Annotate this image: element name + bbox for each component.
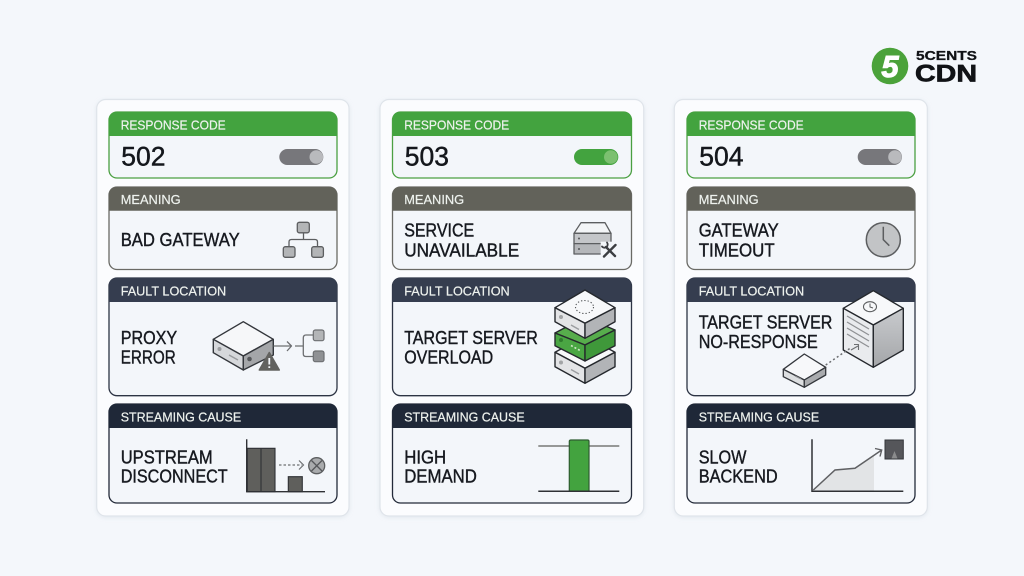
panel: streaming cause slow backend <box>687 404 915 503</box>
panel: response code 504 <box>687 112 915 178</box>
panel: fault location target server overload: OVERLOAD <box>404 346 493 367</box>
panel: response code 503: 503 <box>405 142 449 172</box>
card: 504 <box>674 100 927 516</box>
panel: fault location target server no-response: FAULT LOCATION <box>699 283 804 298</box>
panel: fault location target server overload: TARGET SERVER <box>404 327 538 348</box>
panel: streaming cause high demand: STREAMING CAUSE <box>404 410 525 425</box>
panel: response code 502 <box>109 112 337 178</box>
panel: response code 502: 502 <box>121 142 166 172</box>
panel: response code 503: RESPONSE CODE <box>404 117 509 132</box>
icon: server stack <box>555 290 615 383</box>
bottom server <box>555 336 615 383</box>
logo: 5cents cdn <box>872 48 977 88</box>
panel: meaning bad gateway <box>109 187 337 270</box>
panel: meaning service unavailable <box>392 187 632 270</box>
logo wordmark <box>915 48 977 88</box>
panel: meaning gateway timeout: GATEWAY <box>699 220 779 241</box>
panel: meaning gateway timeout: MEANING <box>699 192 759 207</box>
chart: falling bars <box>247 439 325 492</box>
icon: clock <box>866 223 900 257</box>
logo wordmark: CDN <box>915 61 977 88</box>
panel: meaning gateway timeout: TIMEOUT <box>699 239 775 260</box>
panel: streaming cause slow backend: SLOW <box>699 446 747 467</box>
panel: streaming cause slow backend: BACKEND <box>699 466 778 487</box>
logo mark: 5 <box>881 49 899 84</box>
panel: fault location proxy error: FAULT LOCATION <box>121 283 226 298</box>
panel: fault location target server no-response: NO-RESPONSE <box>699 331 818 352</box>
panel: streaming cause upstream disconnect: UPSTREAM <box>121 446 213 467</box>
panel: streaming cause high demand <box>392 404 632 503</box>
panel: streaming cause upstream disconnect <box>109 404 337 503</box>
panel: response code 503 <box>392 112 632 178</box>
panel: streaming cause high demand: DEMAND <box>404 466 477 487</box>
top server <box>555 290 615 338</box>
panel: streaming cause upstream disconnect: DISCONNECT <box>121 466 228 487</box>
panel: fault location target server no-response: TARGET SERVER <box>699 311 832 332</box>
icon: target server cube <box>843 291 903 367</box>
panel: meaning gateway timeout <box>687 187 915 270</box>
icon: proxy server with warning <box>213 322 324 370</box>
panel: meaning service unavailable: UNAVAILABLE <box>404 239 519 260</box>
panel: response code 504: 504 <box>699 142 744 172</box>
chart: demand spike bar <box>538 440 619 491</box>
toggle on <box>574 149 618 165</box>
arrow to nodes <box>274 335 314 356</box>
panel: response code 504: RESPONSE CODE <box>699 117 804 132</box>
middle green server <box>555 317 615 361</box>
warning triangle <box>259 352 279 370</box>
card: 503 <box>380 100 644 516</box>
dotted connection <box>826 348 850 365</box>
panel: streaming cause slow backend: STREAMING CAUSE <box>699 410 820 425</box>
chart: slow backend line <box>812 439 903 491</box>
panel: fault location target server overload: FAULT LOCATION <box>404 283 510 298</box>
panel: meaning service unavailable: MEANING <box>404 192 464 207</box>
icon: server with tools <box>574 223 619 259</box>
wrench and screwdriver <box>602 242 616 256</box>
panel: streaming cause high demand: HIGH <box>404 446 446 467</box>
panel: fault location proxy error: PROXY <box>121 327 177 348</box>
icon: small proxy server <box>783 354 826 387</box>
panel: fault location target server no-response <box>687 278 915 396</box>
panel: meaning bad gateway: MEANING <box>121 192 181 207</box>
panel: meaning bad gateway: BAD GATEWAY <box>121 229 240 250</box>
panel: streaming cause upstream disconnect: STREAMING CAUSE <box>121 410 242 425</box>
toggle off <box>279 149 323 165</box>
logo wordmark: 5CENTS <box>916 48 977 63</box>
panel: response code 502: RESPONSE CODE <box>121 117 226 132</box>
panel: meaning service unavailable: SERVICE <box>404 220 474 241</box>
card: 502 <box>97 100 349 516</box>
icon: network hierarchy <box>283 222 323 257</box>
panel: fault location proxy error: ERROR <box>121 346 176 367</box>
toggle off <box>858 149 902 165</box>
panel: fault location proxy error <box>109 278 337 396</box>
panel: fault location target server overload <box>392 278 632 396</box>
